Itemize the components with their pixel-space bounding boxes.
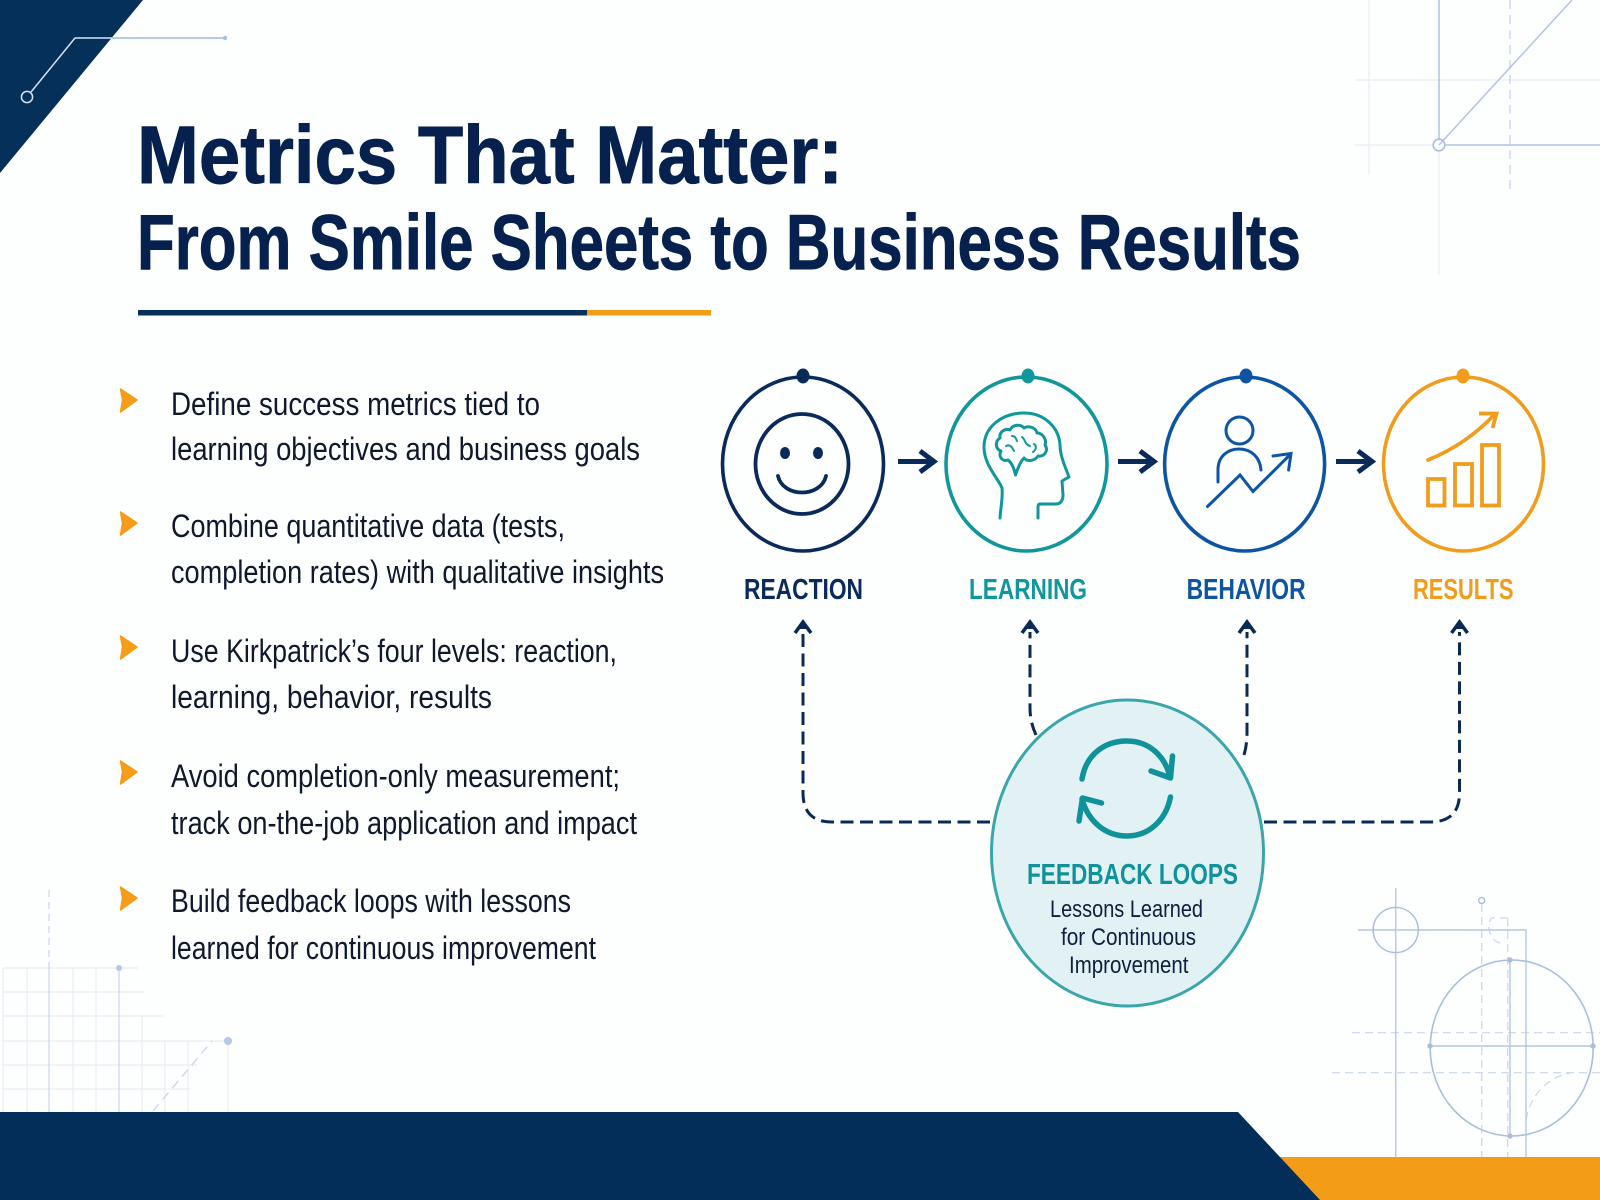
- bullet 1: [120, 386, 640, 467]
- title underline: [138, 310, 711, 316]
- bullet 4: [120, 758, 637, 841]
- bullet 5: [120, 883, 596, 966]
- icon: circular arrows: [1079, 741, 1172, 836]
- bullet 2: [120, 508, 664, 590]
- bullet 3: [120, 633, 617, 715]
- stage: behavior: [1165, 368, 1325, 606]
- corner: top-left navy triangle with circuit line: [0, 0, 227, 173]
- arrow: reaction to learning: [898, 451, 934, 472]
- bullet 1: learning objectives and business goals: [171, 431, 640, 467]
- feedback arrows: dashed connectors: [795, 620, 1468, 822]
- feedback loops hub: Lessons Learned: [1050, 896, 1203, 923]
- stage: reaction: [722, 368, 884, 606]
- stage: learning: [946, 368, 1107, 606]
- bullet 5: learned for continuous improvement: [171, 930, 596, 966]
- bullet 5: Build feedback loops with lessons: [171, 883, 571, 919]
- title: Metrics That Matter:: [137, 110, 843, 201]
- bullet 2: Combine quantitative data (tests,: [171, 508, 565, 544]
- arrow: learning to behavior: [1118, 451, 1154, 472]
- title: [137, 110, 1301, 286]
- stage: reaction: REACTION: [744, 574, 863, 606]
- arrow: behavior to results: [1336, 451, 1372, 472]
- decoration: bottom-left blueprint grid: [3, 890, 232, 1112]
- bullet 4: Avoid completion-only measurement;: [171, 758, 620, 794]
- stage: behavior: BEHAVIOR: [1187, 574, 1306, 606]
- bullet 1: Define success metrics tied to: [171, 386, 540, 422]
- bullet 3: learning, behavior, results: [171, 679, 492, 715]
- bullet 2: completion rates) with qualitative insights: [171, 554, 664, 590]
- bullet 4: track on-the-job application and impact: [171, 805, 637, 841]
- feedback loops hub: for Continuous: [1061, 924, 1196, 951]
- bullet list: [120, 386, 664, 966]
- icon: smiley face: [756, 414, 848, 514]
- decoration: bottom-right blueprint drawing: [1332, 888, 1600, 1157]
- icon: person with rising arrow: [1208, 417, 1291, 506]
- stage: results: [1384, 368, 1544, 606]
- feedback loops hub: FEEDBACK LOOPS: [1027, 859, 1238, 891]
- stage: results: RESULTS: [1413, 574, 1514, 606]
- feedback loops hub: Improvement: [1069, 952, 1189, 979]
- bullet 3: Use Kirkpatrick’s four levels: reaction,: [171, 633, 617, 669]
- icon: bar chart with arrow: [1428, 414, 1499, 506]
- footer: navy and orange band: [0, 1112, 1600, 1200]
- decoration: top-right blueprint lines: [1355, 0, 1600, 275]
- title: From Smile Sheets to Business Results: [137, 198, 1301, 286]
- icon: head with brain: [984, 413, 1069, 518]
- feedback loops hub: [992, 700, 1264, 1006]
- stage: learning: LEARNING: [969, 574, 1087, 606]
